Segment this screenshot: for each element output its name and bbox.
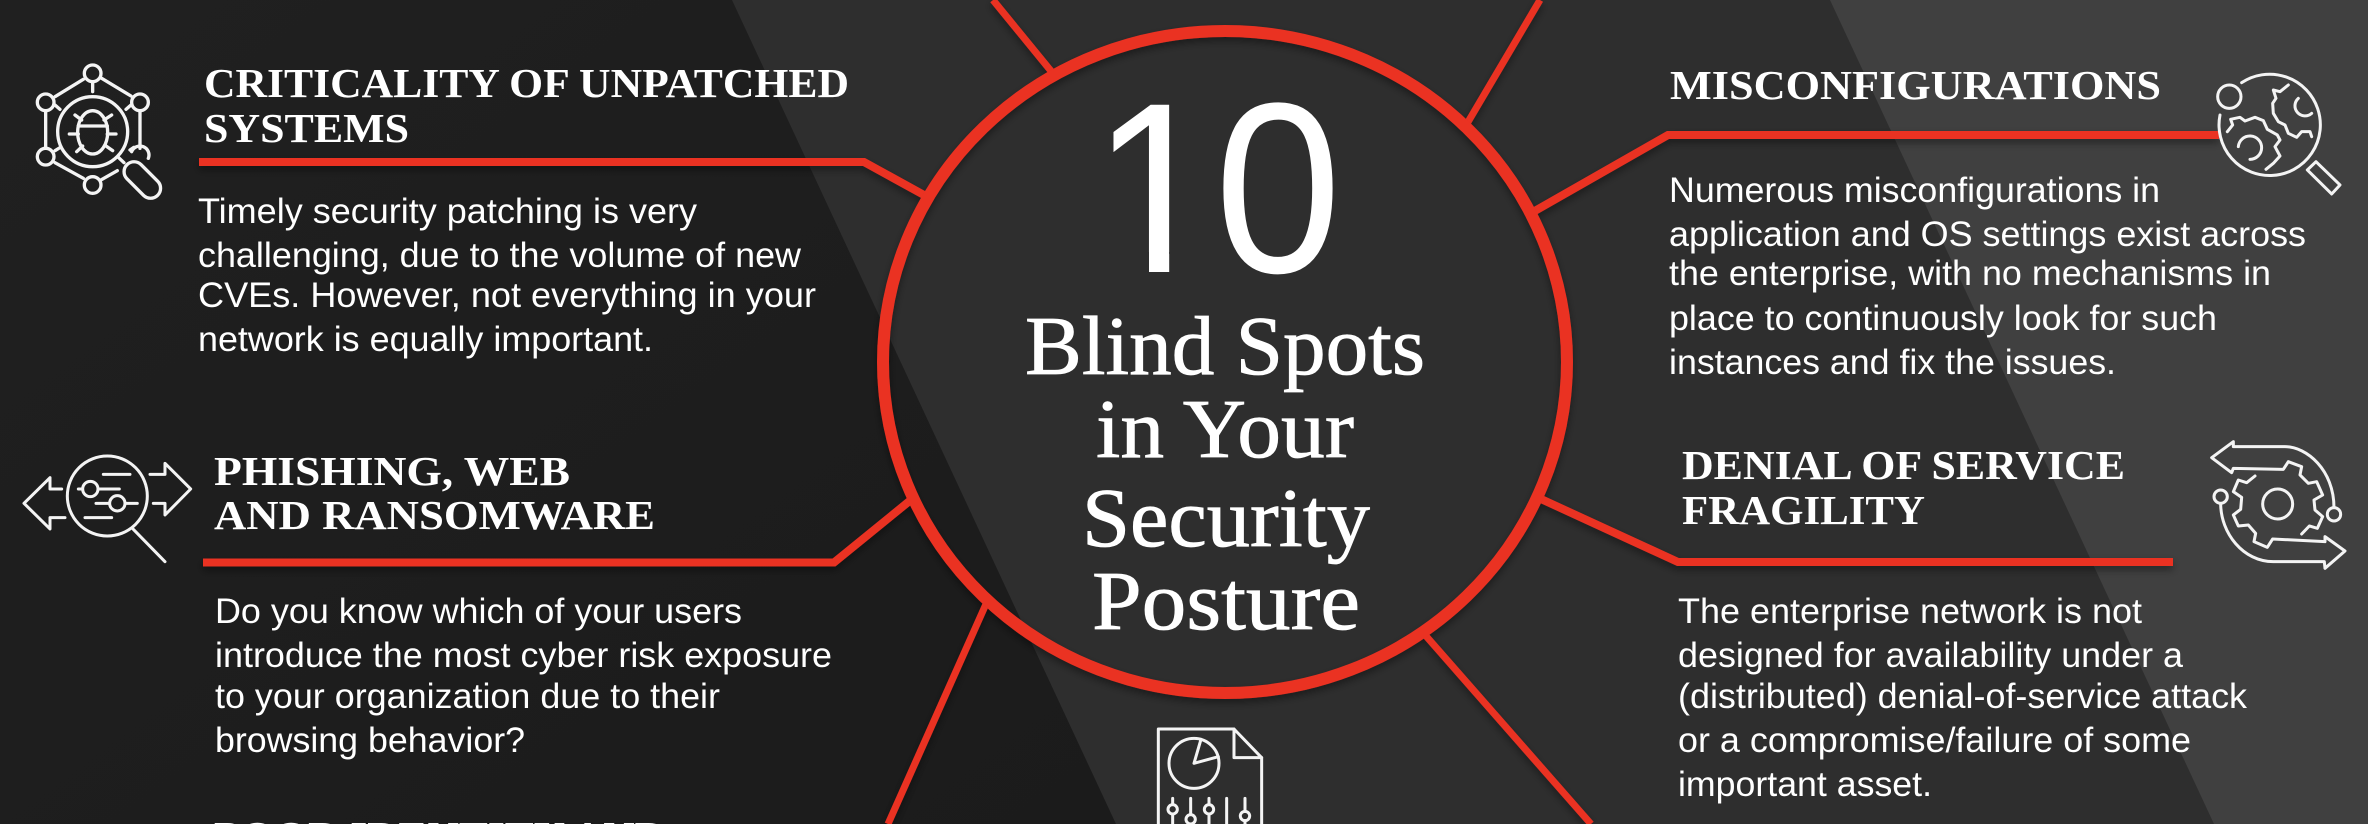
- body text: [1678, 592, 2248, 804]
- body text: to your organization due to their: [215, 677, 720, 716]
- heading: CRITICALITY OF UNPATCHED: [204, 60, 849, 106]
- big number 10: 0: [1214, 53, 1342, 324]
- body text: instances and fix the issues.: [1669, 343, 2116, 382]
- heading: MISCONFIGURATIONS: [1670, 62, 2161, 108]
- background: dark polygon: [0, 0, 1116, 824]
- heading: DENIAL OF SERVICE: [1682, 442, 2125, 488]
- panel: denial of service fragility: [1678, 442, 2345, 804]
- body text: [215, 592, 832, 760]
- body text: the enterprise, with no mechanisms in: [1669, 254, 2271, 293]
- panel: misconfigurations: [1669, 62, 2340, 382]
- body text: or a compromise/failure of some: [1678, 721, 2191, 760]
- heading: [204, 60, 849, 151]
- background: light polygon: [1830, 0, 2368, 824]
- body text: Do you know which of your users: [215, 592, 742, 631]
- body text: place to continuously look for such: [1669, 299, 2217, 338]
- body text: introduce the most cyber risk exposure: [215, 636, 832, 675]
- panel: phishing, web and ransomware: [24, 448, 832, 760]
- title text: Security: [1082, 472, 1370, 565]
- heading: PHISHING, WEB: [214, 448, 570, 494]
- body text: application and OS settings exist across: [1669, 215, 2306, 254]
- heading: FRAGILITY: [1682, 487, 1925, 533]
- body text: designed for availability under a: [1678, 636, 2184, 675]
- big number 10: 1: [1092, 53, 1219, 324]
- title text: [1025, 300, 1425, 648]
- body text: CVEs. However, not everything in your: [198, 276, 816, 315]
- body text: Timely security patching is very: [198, 192, 698, 231]
- body text: browsing behavior?: [215, 721, 525, 760]
- title text: in Your: [1096, 383, 1354, 476]
- panel: criticality of unpatched systems: [37, 60, 849, 359]
- icon: gear with cycle arrows: [2212, 442, 2345, 568]
- body text: network is equally important.: [198, 320, 653, 359]
- body text: important asset.: [1678, 765, 1932, 804]
- icon: gears magnifier: [2218, 74, 2340, 194]
- heading: AND RANSOMWARE: [214, 492, 655, 538]
- body text: Numerous misconfigurations in: [1669, 171, 2160, 210]
- body text: challenging, due to the volume of new: [198, 236, 802, 275]
- heading: [214, 448, 655, 538]
- heading: SYSTEMS: [204, 105, 409, 151]
- title: central heading: [1027, 102, 1422, 630]
- big number 10: [1114, 102, 1333, 274]
- body text: The enterprise network is not: [1678, 592, 2142, 631]
- icon: bug network magnifier: [37, 65, 165, 202]
- title text: Blind Spots: [1025, 300, 1425, 393]
- icon: sliders magnifier with arrows: [24, 456, 191, 562]
- body text: (distributed) denial-of-service attack: [1678, 677, 2248, 716]
- body text: [198, 192, 816, 359]
- title text: Posture: [1092, 555, 1360, 648]
- heading: [1682, 442, 2125, 533]
- icon: document with pie chart and sliders: [1158, 729, 1262, 824]
- body text: [1669, 171, 2306, 382]
